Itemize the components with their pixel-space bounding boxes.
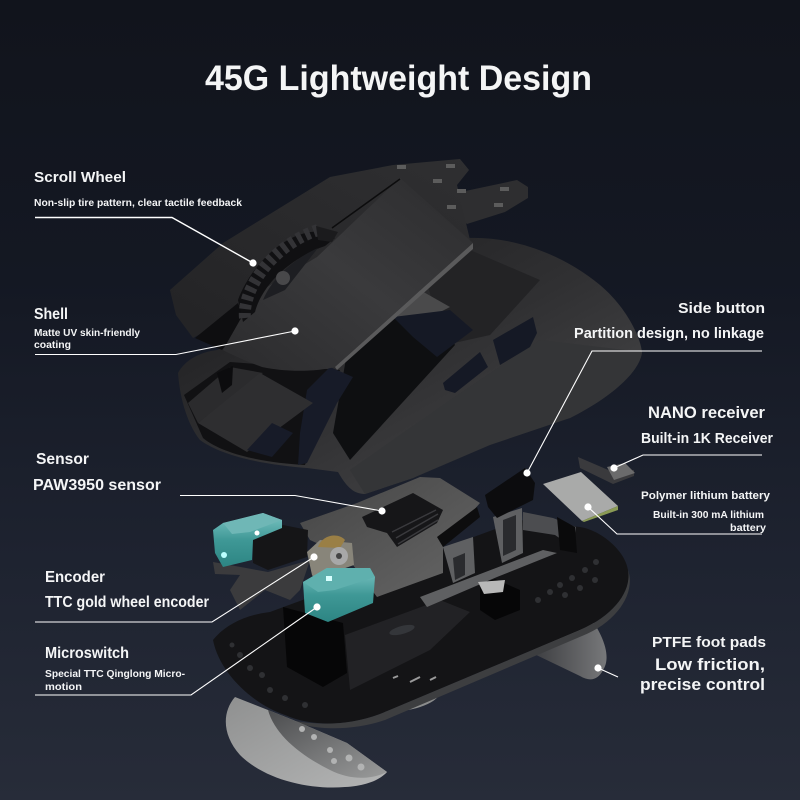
flap pegs [397,164,509,209]
foot pad: right [530,610,607,679]
callout: sensor [33,451,386,515]
callout: nano receiver: NANO receiver [648,404,766,422]
front microswitch [303,568,375,622]
callout: scroll wheel [34,169,257,267]
seam [332,179,400,228]
callout: side button: Partition design, no linkage [574,325,764,342]
rear flap [437,180,528,224]
wheel gap shadow [195,303,245,350]
callout: PTFE foot pads: PTFE foot pads [652,634,766,651]
shell left interior [184,362,340,465]
callout: shell: Shell [34,306,68,323]
PCB [300,477,480,597]
shell dark interior [333,287,455,460]
callout: shell [34,306,299,354]
callout: microswitch: motion [45,682,82,693]
tray ribs [345,600,470,690]
battery [543,472,618,522]
callout: sensor: PAW3950 sensor [33,477,161,494]
mouse exploded view [170,159,642,788]
callout: scroll wheel: Scroll Wheel [34,169,126,186]
callout: encoder: Encoder [45,569,105,586]
callout: shell: coating [34,340,71,351]
callout: battery: battery [730,523,766,534]
cover edge highlight [335,243,473,370]
callout: nano receiver: Built-in 1K Receiver [641,430,773,447]
shell upper shadow [427,250,540,345]
callout: battery: Polymer lithium battery [641,490,771,502]
side button 2 [485,468,535,518]
callout: sensor: Sensor [36,451,89,468]
lower shell [178,238,642,494]
callout: battery [584,490,771,534]
middle pad [385,692,441,712]
callout: nano receiver [610,404,773,472]
shell internal ribs [188,367,263,423]
foot pad: front [226,697,387,788]
encoder [307,536,354,590]
callout: microswitch: Microswitch [45,645,129,662]
callout: shell: Matte UV skin-friendly [34,328,140,339]
tray holes [230,559,599,708]
callout: side button: Side button [678,300,765,317]
nano receiver [578,457,635,484]
callout: microswitch [35,603,321,695]
title: 45G Lightweight Design [205,59,592,98]
callout: PTFE foot pads [594,634,766,694]
callout: encoder: TTC gold wheel encoder [45,594,209,611]
left microswitch [213,513,310,610]
top cover front [223,178,473,371]
callout: battery: Built-in 300 mA lithium [653,510,764,521]
callout: PTFE foot pads: Low friction, [655,655,765,674]
sensor chip [362,493,443,547]
black post [283,607,347,687]
shell right lower sheen [350,340,642,494]
lower tray [213,520,630,728]
callout: side button [523,300,765,477]
callout: PTFE foot pads: precise control [640,675,765,694]
shell openings [393,310,473,357]
black block [480,579,520,620]
callout: encoder [35,553,318,622]
PCB bracket [420,508,577,607]
callout: scroll wheel: Non-slip tire pattern, clear tactile feedback [34,198,242,209]
side button 1 [437,507,480,547]
top cover back [170,159,470,338]
scroll wheel [238,226,338,322]
callout: microswitch: Special TTC Qinglong Micro- [45,669,185,680]
shell light patch [393,290,450,325]
